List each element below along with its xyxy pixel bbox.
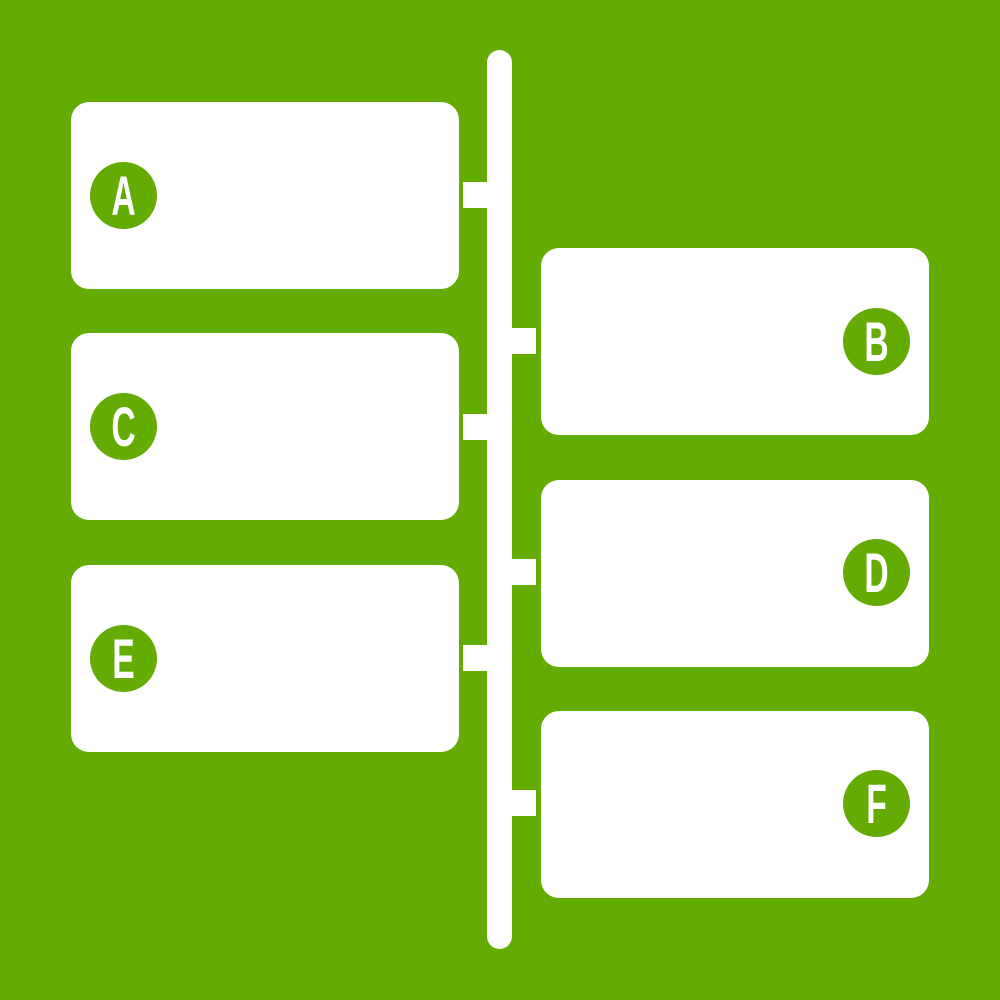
connector A — [463, 182, 488, 208]
badge B: B — [864, 310, 889, 373]
badge A: A — [111, 164, 136, 227]
panel E — [71, 565, 459, 752]
panel C — [71, 333, 459, 520]
vertical timeline bar — [487, 50, 512, 949]
badge D: D — [864, 541, 889, 604]
panel B — [541, 248, 929, 435]
badge A — [90, 162, 157, 229]
panel A — [71, 102, 459, 289]
panel D — [541, 480, 929, 667]
badge C — [90, 393, 157, 460]
connector C — [463, 414, 488, 440]
connector D — [511, 559, 536, 585]
panel F — [541, 711, 929, 898]
badge E: E — [112, 627, 135, 690]
badge B — [843, 308, 910, 375]
connector E — [463, 645, 488, 671]
badge F — [843, 770, 910, 837]
badge F: F — [866, 772, 887, 835]
badge E — [90, 625, 157, 692]
connector F — [511, 790, 536, 816]
badge C: C — [111, 395, 136, 458]
connector B — [511, 328, 536, 354]
badge D — [843, 539, 910, 606]
